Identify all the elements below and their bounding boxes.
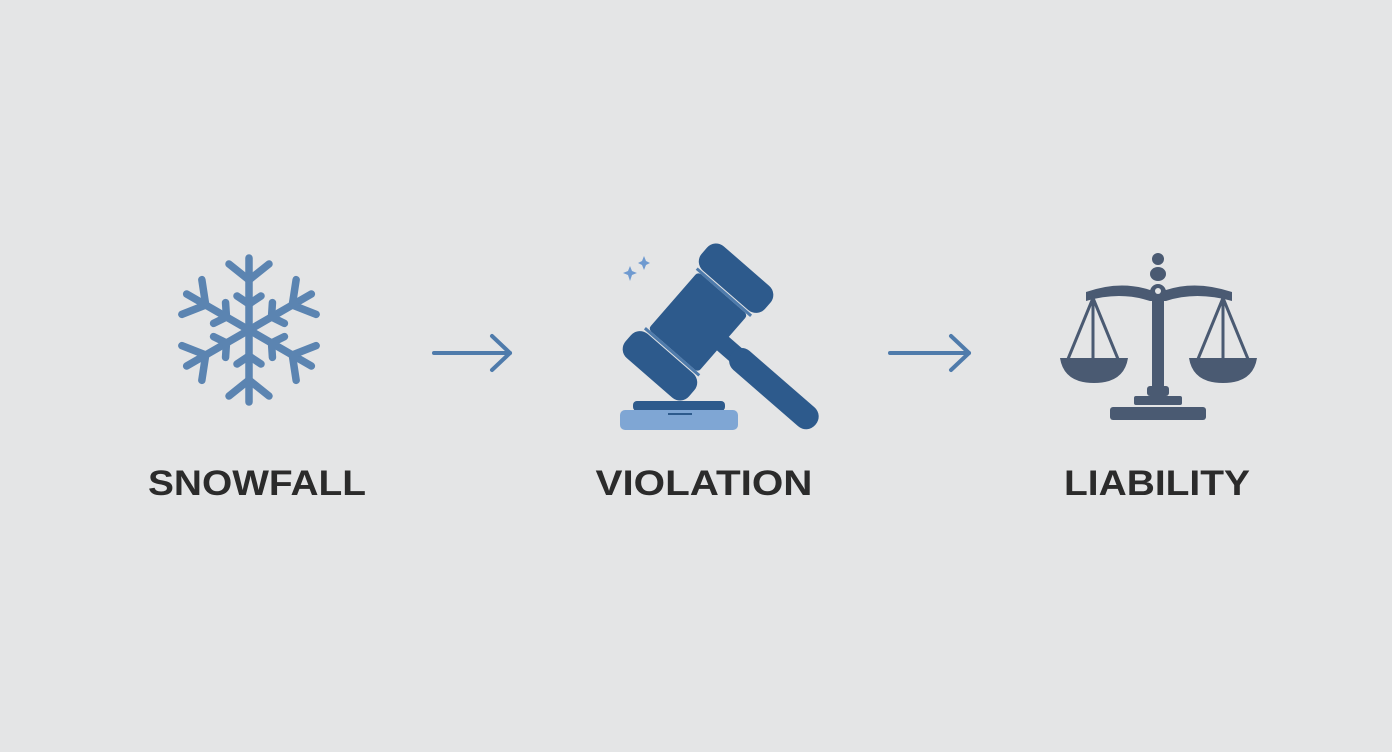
arrow: snowfall to violation	[434, 336, 510, 370]
arrow: violation to liability	[890, 336, 969, 370]
icon: gavel	[618, 239, 864, 480]
icon: snowflake	[177, 258, 321, 402]
label: snowfall: SNOWFALL	[148, 464, 366, 503]
sparkles	[623, 256, 650, 281]
label: liability: LIABILITY	[1064, 464, 1250, 503]
label: violation: VIOLATION	[596, 464, 812, 503]
icon: scales of justice	[1060, 253, 1257, 420]
